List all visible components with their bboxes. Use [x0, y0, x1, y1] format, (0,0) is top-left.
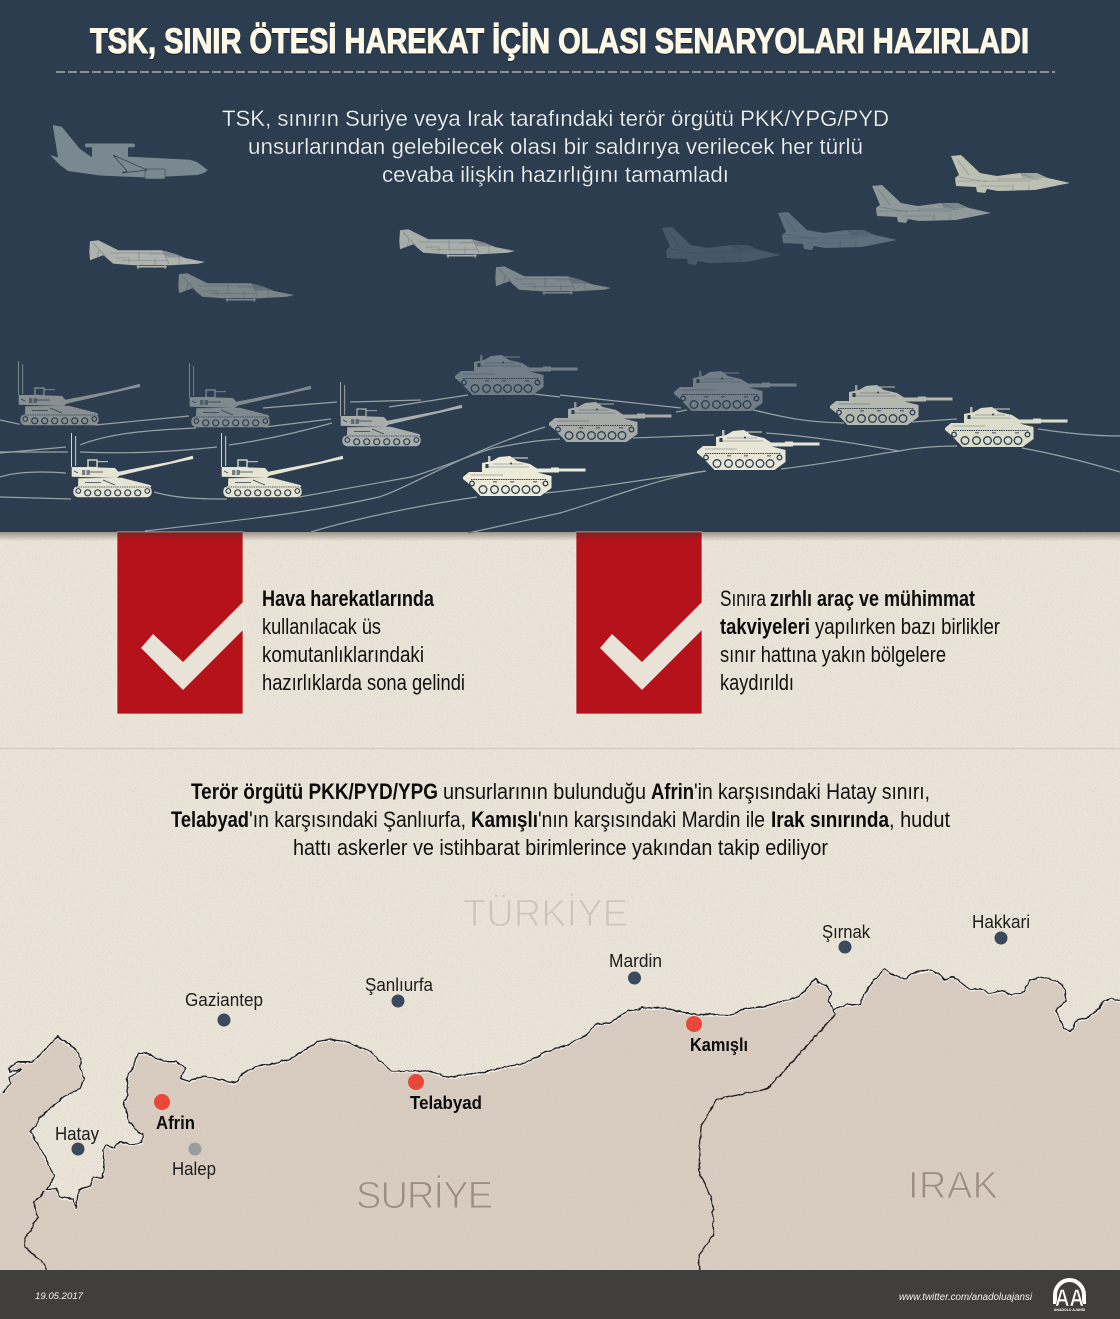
panel: check item 2 — [576, 532, 1000, 714]
intro text: unsurlarından gelebilecek olası bir saldırıya verilecek her türlü — [248, 134, 863, 159]
text: air operations: komutanlıklarındaki — [262, 642, 424, 667]
map border lines — [3, 968, 1120, 1277]
marker: Afrin — [154, 1094, 195, 1133]
intro text — [222, 106, 889, 187]
icon: F-16 aircraft 4 — [662, 227, 781, 265]
source url: www.twitter.com/anadoluajansi — [899, 1292, 1033, 1303]
city: Hakkari — [972, 912, 1030, 944]
text: air operations: kullanılacak üs — [262, 614, 381, 639]
icon: tank 2 — [549, 402, 672, 442]
text: armored reinforcements: yapılırken bazı birlikler — [815, 614, 1000, 639]
footer — [0, 1270, 1120, 1319]
icon: F-16 aircraft 2 — [872, 185, 991, 223]
text: border monitoring paragraph: unsurlarının bulunduğu — [443, 779, 646, 804]
date: 19.05.2017 — [35, 1291, 84, 1302]
intro text: TSK, sınırın Suriye veya Irak tarafındaki terör örgütü PKK/YPG/PYD — [222, 106, 889, 131]
text: armored reinforcements — [720, 586, 1000, 695]
icon: tank 4 — [830, 385, 952, 425]
icon: red check box 2 — [576, 532, 702, 714]
text: border monitoring paragraph: hattı askerler ve istihbarat birimlerince yakından takip ediliyor — [293, 835, 828, 860]
terrain contour lines — [0, 394, 1120, 533]
icon: Anadolu Ajansı logo: AA — [1055, 1285, 1084, 1312]
city: Halep: Halep — [172, 1159, 216, 1179]
city: Halep — [172, 1142, 216, 1179]
icon: tank 7 — [463, 456, 586, 496]
label: Irak: IRAK — [908, 1165, 998, 1207]
text: border monitoring paragraph: Terör örgütü PKK/PYD/YPG — [191, 779, 438, 804]
text: border monitoring paragraph: 'ın karşısındaki Şanlıurfa, — [249, 807, 466, 832]
marker: Telabyad: Telabyad — [410, 1093, 482, 1113]
icon: Anadolu Ajansı logo: ANADOLU AJANSI — [1054, 1308, 1085, 1312]
city: Mardin: Mardin — [609, 951, 662, 971]
text: armored reinforcements: takviyeleri — [720, 614, 810, 639]
panel: navy top section — [0, 0, 1120, 533]
icon: howitzer 4 — [72, 433, 193, 497]
shadow under navy panel — [0, 532, 1120, 541]
text: border monitoring paragraph — [171, 779, 950, 860]
city: Gaziantep: Gaziantep — [185, 990, 263, 1010]
panel: check item 1 — [117, 532, 465, 714]
icon: F-4 aircraft 4 — [495, 266, 611, 295]
text: border monitoring paragraph: Kamışlı — [471, 807, 538, 832]
text: air operations — [262, 586, 465, 695]
icon: howitzer 1 — [18, 361, 140, 425]
city: Mardin — [609, 951, 662, 984]
icon: howitzer 3 — [340, 382, 462, 446]
text: border monitoring paragraph: 'in karşısındaki Hatay sınırı, — [694, 779, 930, 804]
label: Suriye: SURİYE — [356, 1174, 493, 1217]
map land fill — [0, 968, 1120, 1280]
city: Şanlıurfa — [365, 975, 434, 1008]
city: Hatay — [55, 1124, 99, 1156]
map: land shapes and borders — [0, 968, 1120, 1280]
text: border monitoring paragraph: , hudut — [889, 807, 950, 832]
icon: AWACS aircraft — [50, 125, 208, 179]
aircraft group — [50, 125, 1070, 302]
text: air operations: Hava harekatlarında — [262, 586, 435, 611]
icon: tank 3 — [674, 371, 796, 411]
marker: Kamışlı: Kamışlı — [690, 1035, 748, 1055]
icon: howitzer 5 — [222, 433, 343, 497]
city: Şırnak: Şırnak — [822, 922, 871, 942]
marker: Telabyad — [408, 1074, 482, 1113]
marker: Kamışlı — [686, 1016, 748, 1055]
icon: tank 6 — [697, 430, 820, 470]
city: Gaziantep — [185, 990, 263, 1026]
marker: Afrin: Afrin — [156, 1113, 195, 1133]
intro text: cevaba ilişkin hazırlığını tamamladı — [382, 162, 729, 187]
icon: F-16 aircraft 3 — [778, 212, 897, 250]
text: air operations: hazırlıklarda sona gelindi — [262, 670, 465, 695]
icon: red check box — [117, 532, 243, 714]
text: armored reinforcements: sınır hattına yakın bölgelere — [720, 642, 946, 667]
paper grain overlay — [0, 532, 1120, 1270]
text: armored reinforcements: Sınıra — [720, 586, 767, 611]
icon: F-4 aircraft 1 — [89, 240, 205, 269]
icon: howitzer 2 — [190, 363, 311, 427]
city: Hakkari: Hakkari — [972, 912, 1030, 932]
icon: F-4 aircraft 3 — [399, 229, 515, 258]
text: border monitoring paragraph: Irak sınırında — [771, 807, 890, 832]
city: Şanlıurfa: Şanlıurfa — [365, 975, 434, 995]
map labels — [55, 892, 1030, 1217]
text: armored reinforcements: kaydırıldı — [720, 670, 794, 695]
icon: tank 5 — [945, 407, 1068, 447]
icon: F-16 aircraft 1 — [951, 155, 1070, 193]
text: border monitoring paragraph: Telabyad — [171, 807, 249, 832]
label: Türkiye: TÜRKİYE — [463, 892, 628, 935]
text: border monitoring paragraph: Afrin — [651, 779, 694, 804]
city: Şırnak — [822, 922, 871, 954]
icon: F-4 aircraft 2 — [178, 273, 294, 302]
city: Hatay: Hatay — [55, 1124, 99, 1144]
icon: tank 1 — [455, 355, 578, 395]
vehicles group — [18, 355, 1068, 497]
text: border monitoring paragraph: 'nın karşısındaki Mardin ile — [538, 807, 765, 832]
text: armored reinforcements: zırhlı araç ve mühimmat — [770, 586, 976, 611]
